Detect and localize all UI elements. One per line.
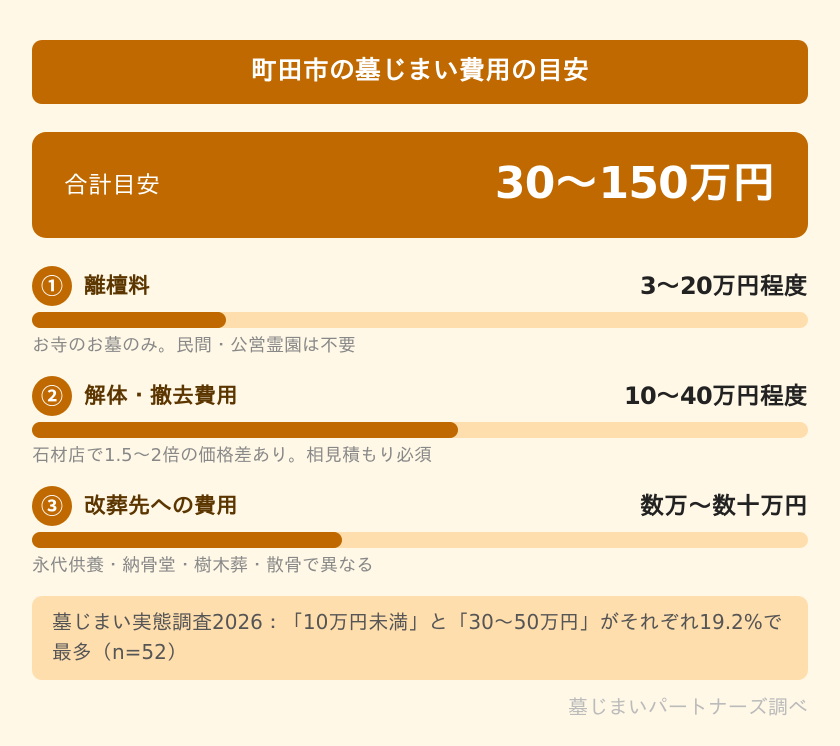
item 1 value: 3〜20万円程度	[640, 272, 808, 300]
item 3 value: 数万〜数十万円	[640, 492, 808, 520]
item 2 value: 10〜40万円程度	[624, 382, 808, 410]
number badge 2: ②	[41, 379, 63, 411]
title: 町田市の墓じまい費用の目安	[251, 56, 589, 86]
callout: survey result	[32, 596, 808, 680]
title	[32, 40, 808, 104]
number badge 1	[32, 266, 72, 306]
item 1 note: お寺のお墓のみ。民間・公営霊園は不要	[32, 335, 356, 356]
panel: item 1	[32, 266, 808, 356]
number badge 1: ①	[41, 269, 63, 301]
panel: item 3	[32, 486, 808, 576]
item 2 note: 石材店で1.5〜2倍の価格差あり。相見積もり必須	[32, 445, 432, 466]
item 2 label: 解体・撤去費用	[84, 384, 238, 409]
source note: 墓じまいパートナーズ調べ	[568, 695, 808, 719]
number badge 3: ③	[41, 489, 63, 521]
number badge 3	[32, 486, 72, 526]
total label: 合計目安	[64, 171, 160, 199]
item 1 label: 離檀料	[84, 274, 150, 299]
panel: total estimate	[32, 132, 808, 238]
total amount: 30〜150万円	[495, 158, 776, 209]
number badge 2	[32, 376, 72, 416]
item 3 note: 永代供養・納骨堂・樹木葬・散骨で異なる	[32, 555, 374, 576]
item 2 bar	[32, 422, 808, 438]
item 1 bar	[32, 312, 808, 328]
callout: survey result: 墓じまい実態調査2026：「10万円未満」と「30〜50万円」がそれぞれ19.2%で最多（n=52）	[52, 610, 783, 664]
item 3 bar	[32, 532, 808, 548]
panel: item 2	[32, 376, 808, 466]
item 3 label: 改葬先への費用	[84, 494, 238, 519]
